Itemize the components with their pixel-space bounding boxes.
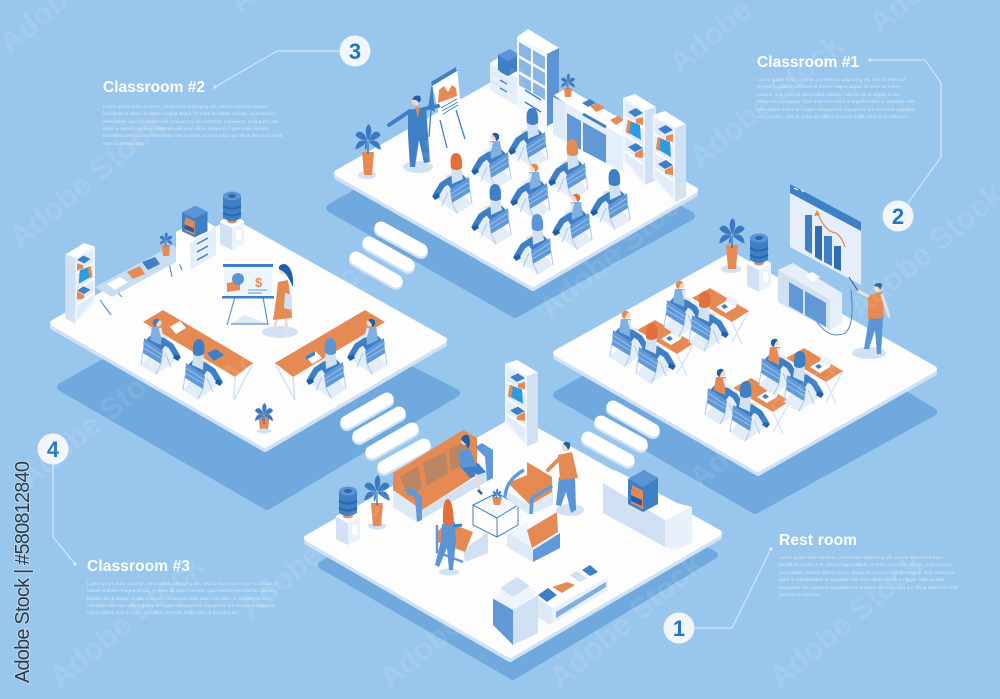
presenter [389, 96, 438, 173]
seated students [141, 319, 387, 400]
platform: left room [53, 221, 444, 449]
callout: Classroom #2: Lorem ipsum dolor sit amet, consectetur adipiscing elit, sed do eiusmod tempor [103, 104, 268, 109]
callout: Classroom #3: 4 [47, 437, 60, 462]
water cooler [747, 234, 771, 292]
watermarks: Adobe Stock [232, 476, 400, 625]
floor plant [255, 403, 273, 434]
callout: Classroom #1: Classroom #1 [757, 54, 859, 71]
watermarks: Adobe Stock [682, 346, 850, 495]
reception counter [603, 470, 692, 550]
callout: Classroom #1: non proident, sunt in culpa qui officia deserunt mollit anim id est laborum. [757, 114, 908, 119]
callout: Classroom #1: veniam, quis nostrud exercitation ullamco laboris nisi ut aliquip ex ea [757, 92, 900, 97]
callout: Classroom #2: Classroom #2 [103, 79, 205, 96]
right table [275, 310, 385, 400]
presenter [262, 264, 298, 338]
low cabinet [553, 88, 624, 172]
bookshelf [505, 360, 538, 446]
callout: Classroom #1: esse cillum dolore eu fugiat nulla pariatur. Excepteur sint occaecat cupidatat [757, 107, 915, 112]
bookshelf [653, 111, 686, 202]
callout: Classroom #1: 2 [892, 204, 904, 229]
coffee machine [628, 470, 658, 512]
watermarks: Adobe Stock [42, 546, 210, 695]
armchair right [505, 462, 553, 515]
seated students [432, 108, 630, 275]
whiteboard chart [790, 184, 861, 285]
panel: top classroom furniture and people [355, 29, 686, 275]
standing man [548, 442, 584, 516]
low table [538, 565, 608, 625]
plant [364, 475, 390, 530]
watermarks: Adobe Stock [372, 546, 540, 695]
callout: Classroom #2: exercitation ullamco laboris nisi ut aliquip ex ea commodo consequat. Duis aute irure [103, 119, 279, 124]
watermarks: Adobe Stock [532, 176, 700, 325]
callout: Classroom #3: labore et dolore magna aliqua. Ut enim ad minim veniam, quis nostrud exercitation ullamco [87, 588, 276, 593]
sofa [393, 430, 493, 522]
presenter [849, 277, 889, 359]
cabinet [778, 263, 842, 330]
callout: Classroom #3 [38, 434, 278, 615]
platform: right room [556, 255, 934, 473]
stock id text: Adobe Stock | #580812840 [12, 461, 34, 683]
seated students [610, 281, 824, 442]
callout: Classroom #2 [103, 36, 370, 146]
pointer cable [817, 290, 852, 335]
plant [355, 124, 381, 179]
watermarks: Adobe Stock [12, 346, 180, 495]
callout: Classroom #2: anim id est laborum. [103, 141, 145, 146]
callout: Rest room: Rest room [779, 532, 857, 549]
table [733, 372, 790, 434]
armchair left [437, 522, 488, 562]
presentation board [222, 264, 274, 325]
callout: Classroom #3: laboris nisi ut aliquip ex ea commodo consequat. Duis aute irure dolor in reprehenderit in [87, 596, 271, 601]
drawer cabinet [176, 218, 216, 270]
water cooler [336, 486, 360, 545]
callout: Rest room: exercitation ullamco laboris nisi ut aliquip ex ea commodo consequat. Duis aute irure [779, 570, 955, 575]
panel: rest room furniture and people [336, 360, 692, 645]
coffee machine [182, 206, 208, 237]
presentation board: $ [255, 275, 263, 290]
callout: Classroom #3: Classroom #3 [87, 558, 190, 575]
callout: Rest room [664, 532, 959, 644]
watermarks: Adobe Stock [682, 26, 850, 175]
floor shadows [61, 108, 933, 676]
drawer cabinet [490, 49, 530, 106]
tall shelf [517, 29, 559, 128]
callout: Classroom #3: non proident, sunt in culpa qui officia deserunt mollit anim id est laborum. [87, 610, 238, 615]
callout: Rest room: dolor in reprehenderit in voluptate velit esse cillum dolore eu fugiat nulla pariatur. [779, 577, 946, 582]
callout: Classroom #3: Lorem ipsum dolor sit amet, consectetur adipiscing elit, sed do eiusmod tempor incididunt ut [87, 581, 278, 586]
bookshelves [623, 94, 656, 185]
watermarks: Adobe Stock [212, 246, 380, 395]
bookshelf [65, 243, 95, 323]
stairs: left room [347, 399, 424, 469]
callout: Rest room: incididunt ut labore et dolore magna aliqua. Ut enim ad minim veniam, quis nostrud [779, 562, 951, 567]
water cooler [220, 192, 244, 250]
callout: Rest room: Lorem ipsum dolor sit amet, consectetur adipiscing elit, sed do eiusmod tempor [779, 555, 944, 560]
callout: Classroom #2: dolor in reprehenderit in voluptate velit esse cillum dolore eu fugiat nulla pariatur. [103, 126, 270, 131]
plant [719, 218, 745, 273]
callout: Rest room: anim id est laborum. [779, 592, 821, 597]
panel: right classroom furniture and people [610, 184, 889, 442]
coffee table [473, 488, 518, 537]
table [637, 314, 694, 376]
armchair lower right [507, 512, 560, 562]
side table [95, 232, 185, 315]
panel: left classroom furniture and people [65, 192, 387, 434]
watermarks: Adobe Stock [2, 106, 170, 255]
platform: rest room [307, 419, 719, 659]
watermarks: Adobe Stock [372, 56, 540, 205]
callout: Classroom #2: 3 [349, 39, 361, 64]
table groups [692, 282, 749, 344]
callout: Classroom #2: incididunt ut labore et dolore magna aliqua. Ut enim ad minim veniam, quis nostrud [103, 111, 275, 116]
left table [143, 310, 253, 400]
callout: Classroom #1: commodo consequat. Duis aute irure dolor in reprehenderit in voluptate velit [757, 99, 915, 104]
callout: Rest room: 1 [673, 616, 685, 641]
table [786, 342, 843, 404]
platform: top room [337, 81, 695, 288]
callout: Classroom #2: Excepteur sint occaecat cupidatat non proident, sunt in culpa qui officia deserunt mollit [103, 133, 283, 138]
callout: Rest room: Excepteur sint occaecat cupidatat non proident, sunt in culpa qui officia deserunt mollit [779, 585, 959, 590]
seated woman [459, 435, 486, 494]
callout: Classroom #1: Lorem ipsum dolor sit amet, consectetur adipiscing elit, sed do eiusmod [757, 77, 906, 82]
stairs: top room [356, 228, 421, 283]
watermarks: Adobe Stock [542, 546, 710, 695]
printer [492, 577, 538, 645]
standing woman [435, 499, 462, 576]
callout: Classroom #1 [757, 54, 941, 232]
flipchart [428, 67, 465, 148]
callout: Classroom #3: voluptate velit esse cillum dolore eu fugiat nulla pariatur. Excepteur sint occaecat cupidatat [87, 603, 275, 608]
watermarks: Adobe Stock [762, 546, 930, 695]
stairs: right room [588, 407, 653, 462]
small plant [561, 74, 575, 97]
callout: Classroom #1: tempor incididunt ut labore et dolore magna aliqua. Ut enim ad minim [757, 84, 900, 89]
